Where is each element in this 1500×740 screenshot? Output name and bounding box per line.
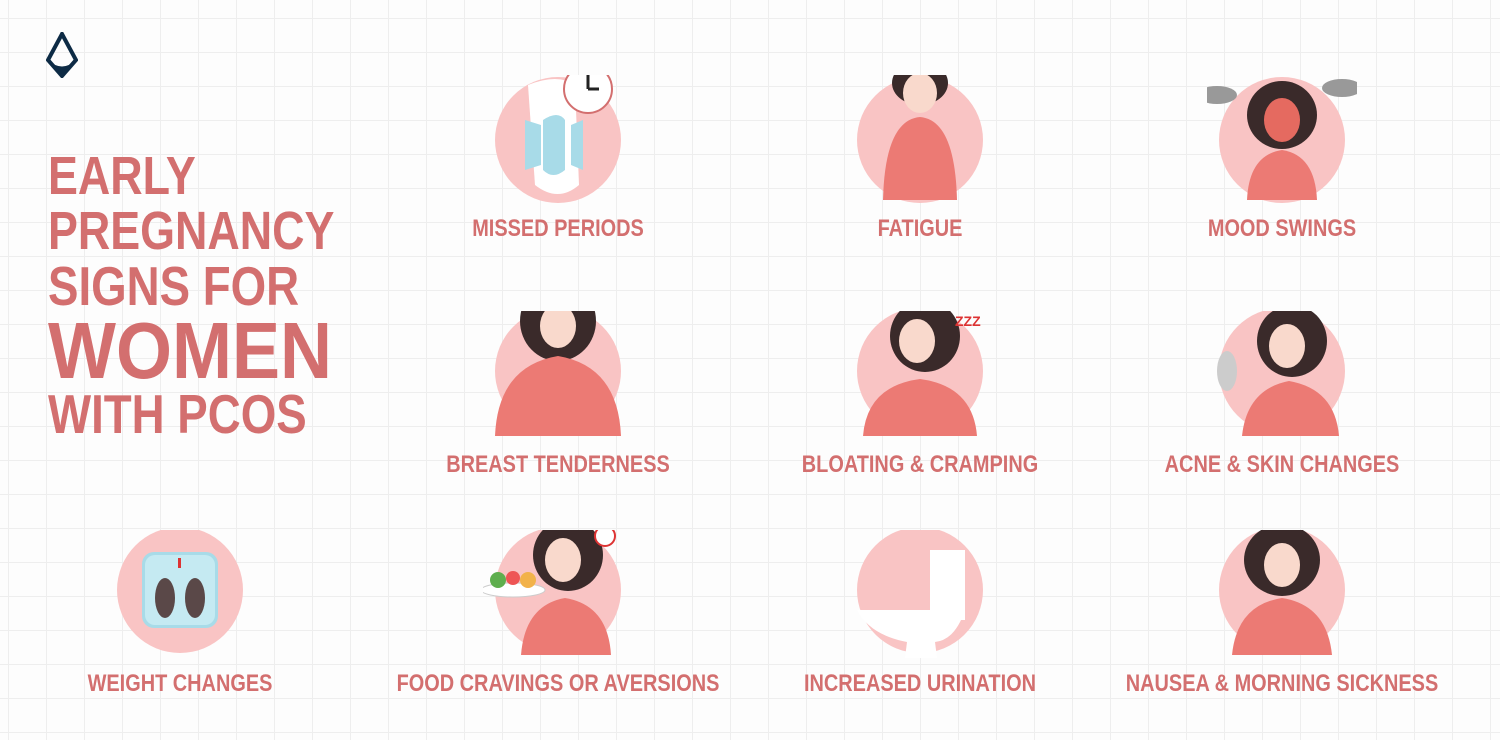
title: WOMEN xyxy=(48,306,332,395)
logo xyxy=(46,32,78,78)
label: BREAST TENDERNESS xyxy=(446,451,670,478)
icon: tired woman xyxy=(857,75,983,203)
item: fatigue xyxy=(857,75,983,242)
label: WEIGHT CHANGES xyxy=(88,670,272,697)
icon: woman with mirror xyxy=(1217,311,1345,436)
label: INCREASED URINATION xyxy=(804,670,1036,697)
item: food cravings xyxy=(397,530,719,697)
item: breast tenderness xyxy=(446,311,670,478)
item: missed periods xyxy=(472,75,644,242)
item: mood swings xyxy=(1207,77,1357,242)
label: MOOD SWINGS xyxy=(1208,215,1356,242)
icon: woman xyxy=(857,311,983,436)
item: bloating xyxy=(802,311,1038,478)
title: PREGNANCY xyxy=(48,201,334,261)
item: urination xyxy=(804,530,1036,697)
icon: angry woman with clouds xyxy=(1207,77,1357,203)
label: NAUSEA & MORNING SICKNESS xyxy=(1126,670,1438,697)
title: EARLY xyxy=(48,146,196,206)
icon: pad and clock xyxy=(495,75,621,203)
title: WITH PCOS xyxy=(48,383,307,445)
label: ACNE & SKIN CHANGES xyxy=(1165,451,1399,478)
icon: woman: ZZZ xyxy=(955,313,981,329)
label: FATIGUE xyxy=(878,215,962,242)
icon: scale xyxy=(117,530,243,653)
title: SIGNS FOR xyxy=(48,255,299,317)
title xyxy=(48,146,334,445)
icon: woman xyxy=(495,311,621,436)
item: acne xyxy=(1165,311,1399,478)
item: weight changes xyxy=(88,530,272,697)
label: BLOATING & CRAMPING xyxy=(802,451,1038,478)
label: FOOD CRAVINGS OR AVERSIONS xyxy=(397,670,719,697)
icon: woman with plate xyxy=(483,530,621,655)
icon: toilet xyxy=(857,530,983,658)
icon: woman xyxy=(1219,530,1345,655)
item: nausea xyxy=(1126,530,1438,697)
label: MISSED PERIODS xyxy=(472,215,644,242)
